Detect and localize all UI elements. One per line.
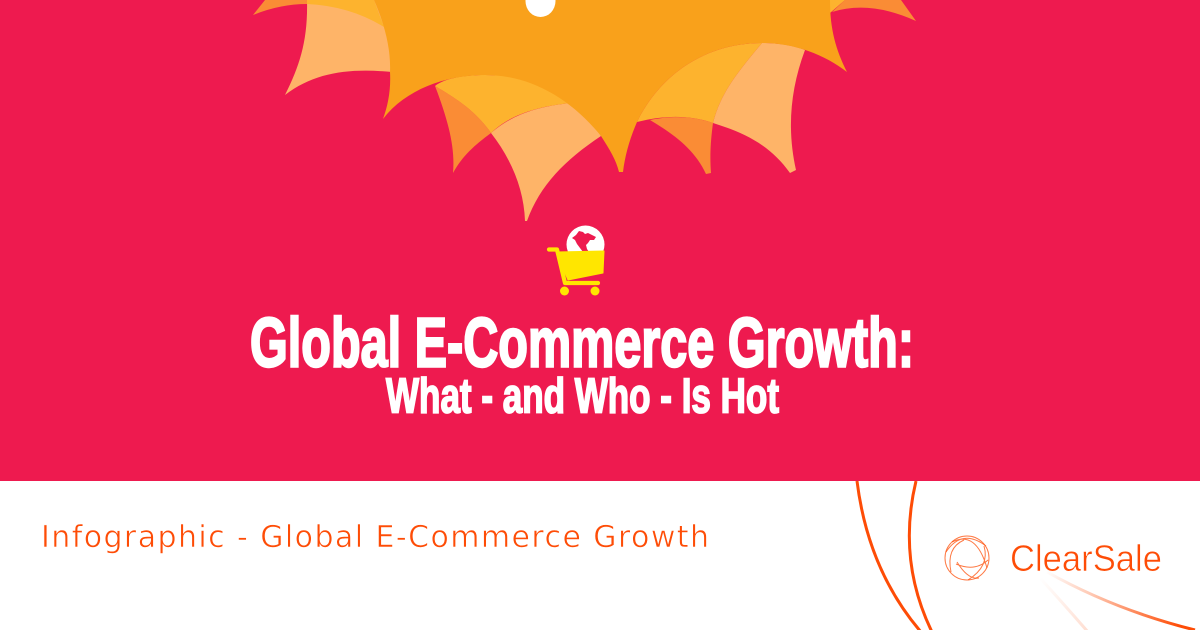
sun illustration — [253, 0, 916, 221]
sun centre hole — [526, 0, 556, 17]
cart frame — [549, 250, 598, 283]
sun body — [374, 0, 847, 172]
sun ray: lower left overlap — [435, 75, 570, 133]
sun ray: top right overlap — [830, 0, 845, 13]
ClearSale wordmark: ClearSale — [1010, 538, 1162, 579]
decorative orange arcs — [857, 481, 1195, 630]
globe land — [572, 231, 596, 252]
icon: shopping cart with globe — [549, 226, 604, 296]
sun ray: lower left orange — [435, 86, 491, 173]
subtitle: What - and Who - Is Hot — [386, 370, 779, 424]
cart wheels — [560, 286, 569, 296]
white footer panel — [0, 481, 1200, 630]
cart basket — [556, 251, 604, 280]
red background panel — [0, 0, 1200, 481]
title: Global E-Commerce Growth: — [250, 304, 914, 382]
sun ray: right peach — [713, 43, 805, 173]
sun ray: lower right orange — [650, 117, 713, 174]
sun ray: upper left peach — [285, 0, 392, 95]
sun ray: lower centre peach — [491, 103, 601, 221]
sun ray: top right orange — [832, 0, 916, 21]
sun ray: right overlap — [637, 43, 762, 123]
sun ray: top left overlap — [307, 0, 384, 27]
sun ray: top left orange — [253, 0, 307, 15]
footer caption: Infographic - Global E-Commerce Growth — [41, 520, 709, 555]
icon: ClearSale logo mark — [945, 536, 989, 580]
globe — [566, 226, 604, 264]
